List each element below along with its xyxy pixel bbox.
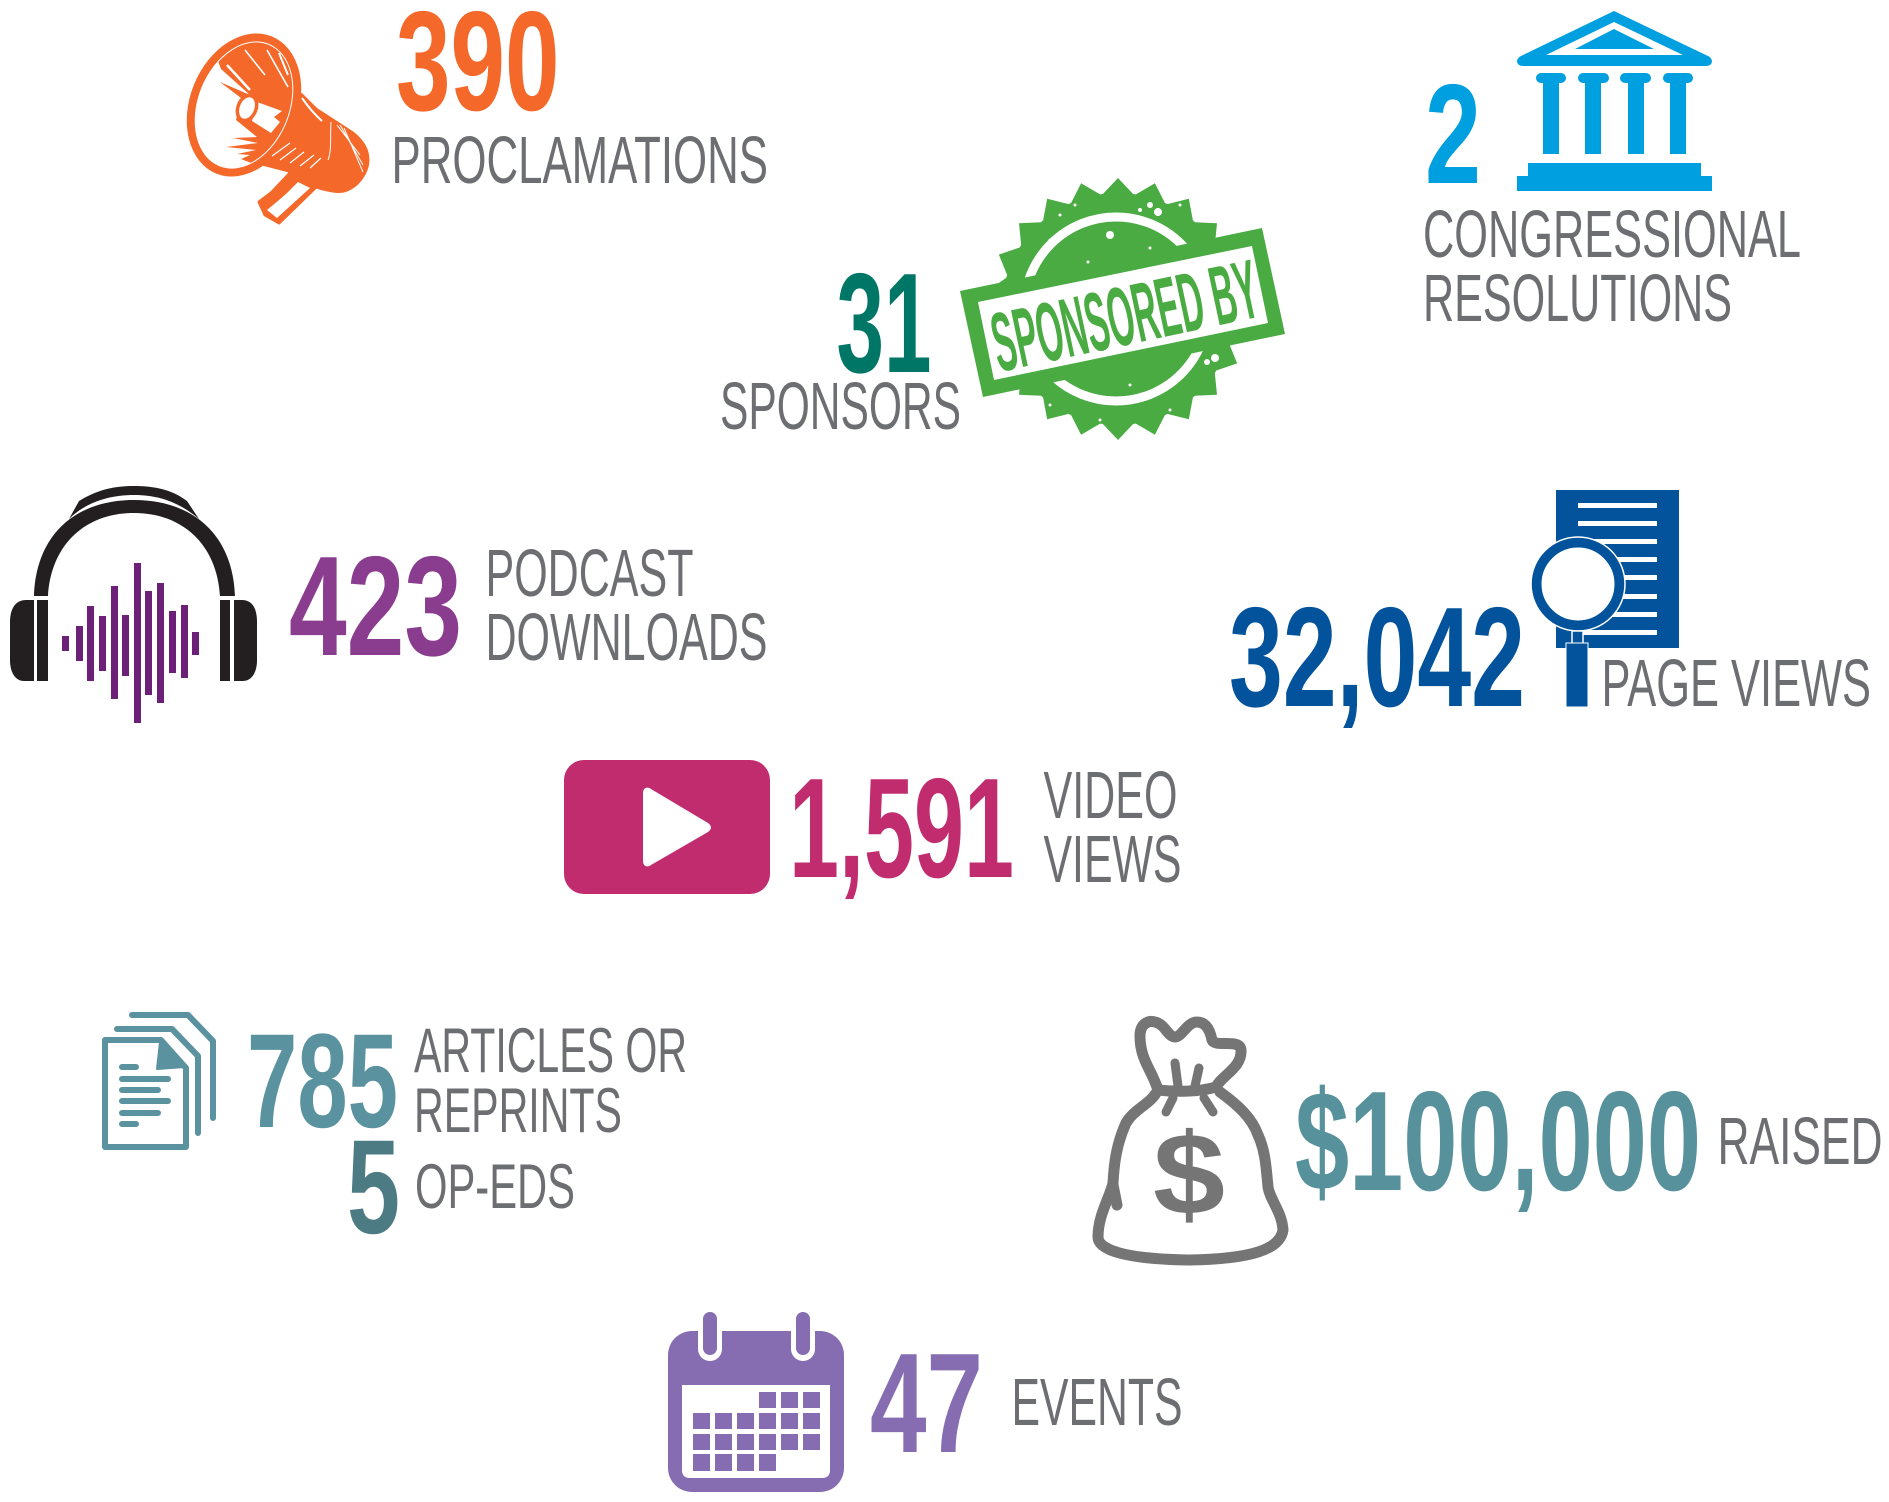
number: $100,000: $100,000 xyxy=(1295,1062,1701,1221)
stat: funds raised xyxy=(1098,1022,1882,1260)
label: views: VIEWS xyxy=(1044,822,1182,897)
icon: document and magnifier xyxy=(1531,490,1679,707)
number: 32,042: 32,042 xyxy=(1229,578,1525,737)
icon: calendar xyxy=(668,1312,844,1492)
label: op-eds: OP-EDS xyxy=(415,1152,575,1222)
stat: proclamations xyxy=(166,0,768,223)
number: 2: 2 xyxy=(1425,55,1481,214)
icon: headphones with sound wave xyxy=(10,486,257,723)
number: 31: 31 xyxy=(836,244,932,403)
stat: video views xyxy=(564,749,1182,908)
label: events: EVENTS xyxy=(1012,1365,1182,1440)
label: proclamations: PROCLAMATIONS xyxy=(392,123,768,198)
number: 5: 5 xyxy=(347,1113,400,1262)
number: 47: 47 xyxy=(870,1324,983,1483)
stat: articles and op-eds xyxy=(105,1007,687,1262)
label: resolutions: RESOLUTIONS xyxy=(1423,261,1732,336)
label: reprints: REPRINTS xyxy=(414,1076,622,1146)
infographic: SPONSORED BY xyxy=(983,242,1267,390)
stat: congressional resolutions xyxy=(1423,11,1801,336)
icon: money bag xyxy=(1098,1022,1283,1260)
label: downloads: DOWNLOADS xyxy=(486,600,768,675)
number: 423: 423 xyxy=(289,527,462,686)
stat: podcast downloads xyxy=(10,486,768,723)
label: articles or: ARTICLES OR xyxy=(414,1016,687,1086)
icon: sponsored by stamp xyxy=(960,178,1285,440)
label: sponsors: SPONSORS xyxy=(720,369,961,444)
dollar sign on bag: $ xyxy=(1153,1109,1225,1239)
number: 1,591: 1,591 xyxy=(789,749,1014,908)
icon: capitol building xyxy=(1517,11,1712,191)
stat: events xyxy=(668,1312,1182,1492)
stat: sponsors xyxy=(720,178,1285,444)
icon: play button xyxy=(564,760,770,894)
label: video: VIDEO xyxy=(1044,758,1178,833)
stat: page views xyxy=(1229,490,1871,737)
icon: stacked documents xyxy=(105,1015,213,1147)
icon: megaphone xyxy=(186,34,370,224)
label: podcast: PODCAST xyxy=(486,536,694,611)
number: 785: 785 xyxy=(247,1007,398,1156)
